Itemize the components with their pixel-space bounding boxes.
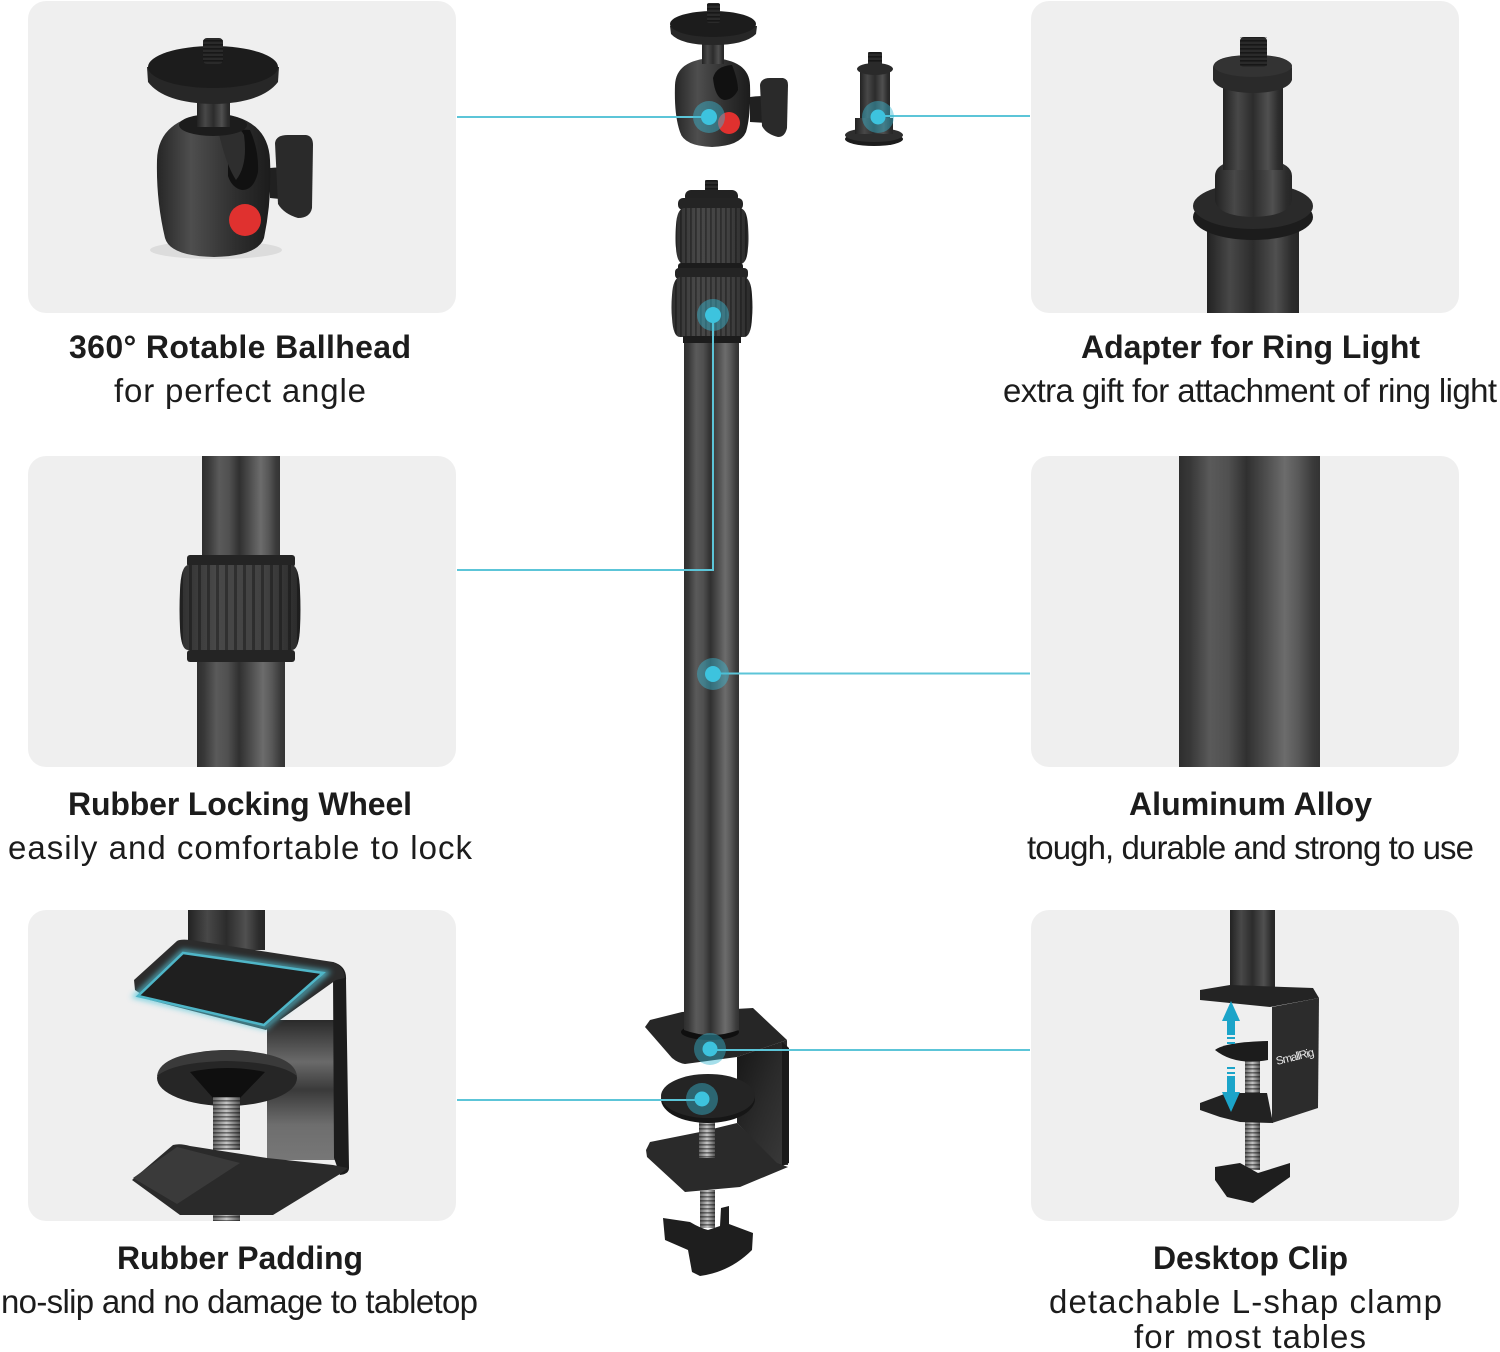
text: detachable L-shap clamp for most tables xyxy=(1049,1283,1442,1352)
arrow: up adjust xyxy=(1222,1001,1240,1044)
text: detachable L-shap clamp for most tables: detachable L-shap clamp xyxy=(1049,1283,1442,1320)
marker: clamp xyxy=(694,1033,726,1065)
label: brand on clamp: SmallRig xyxy=(1275,1047,1316,1068)
icon: large ballhead xyxy=(147,38,313,259)
icon: desktop clip clamp xyxy=(1200,910,1319,1203)
heading: rubber locking wheel: Rubber Locking Wheel xyxy=(68,786,412,822)
text: no-slip and no damage to tabletop: no-slip and no damage to tabletop xyxy=(1,1283,478,1320)
product: small ballhead xyxy=(670,3,788,147)
marker: locking wheel xyxy=(697,299,729,331)
product: telescopic pole xyxy=(672,180,752,1040)
product: central clamp xyxy=(645,1000,789,1276)
connector lines xyxy=(457,116,1030,1100)
marker: ballhead xyxy=(693,101,725,133)
panel: rubber locking wheel xyxy=(28,456,456,767)
heading: adapter for ring light: Adapter for Ring Light xyxy=(1081,329,1420,365)
icon: aluminum tube xyxy=(1179,456,1320,767)
panel: 360 rotable ballhead xyxy=(28,1,456,313)
text: tough, durable and strong to use: tough, durable and strong to use xyxy=(1027,829,1474,866)
icon: locking wheel on pole xyxy=(180,456,300,767)
icon: large adapter xyxy=(1193,37,1313,313)
icon: clamp with rubber pad xyxy=(132,910,349,1221)
panel: rubber padding xyxy=(28,910,456,1221)
text: extra gift for attachment of ring light: extra gift for attachment of ring light xyxy=(1003,372,1497,409)
marker: rubber disc xyxy=(686,1083,718,1115)
heading: rubber padding: Rubber Padding xyxy=(117,1240,363,1276)
text: for perfect angle: for perfect angle xyxy=(114,372,366,409)
panel: desktop clip xyxy=(1031,910,1459,1221)
heading: 360 rotable ballhead: 360° Rotable Ballhead xyxy=(69,329,411,365)
arrow: down adjust xyxy=(1222,1067,1240,1112)
marker: aluminum tube xyxy=(697,658,729,690)
text: easily and comfortable to lock: easily and comfortable to lock xyxy=(8,829,472,866)
heading: aluminum alloy: Aluminum Alloy xyxy=(1129,786,1372,822)
product: small adapter xyxy=(845,52,903,146)
marker: adapter xyxy=(862,101,894,133)
panel: aluminum alloy xyxy=(1031,456,1459,767)
heading: desktop clip: Desktop Clip xyxy=(1153,1240,1348,1276)
panel: adapter for ring light xyxy=(1031,1,1459,313)
